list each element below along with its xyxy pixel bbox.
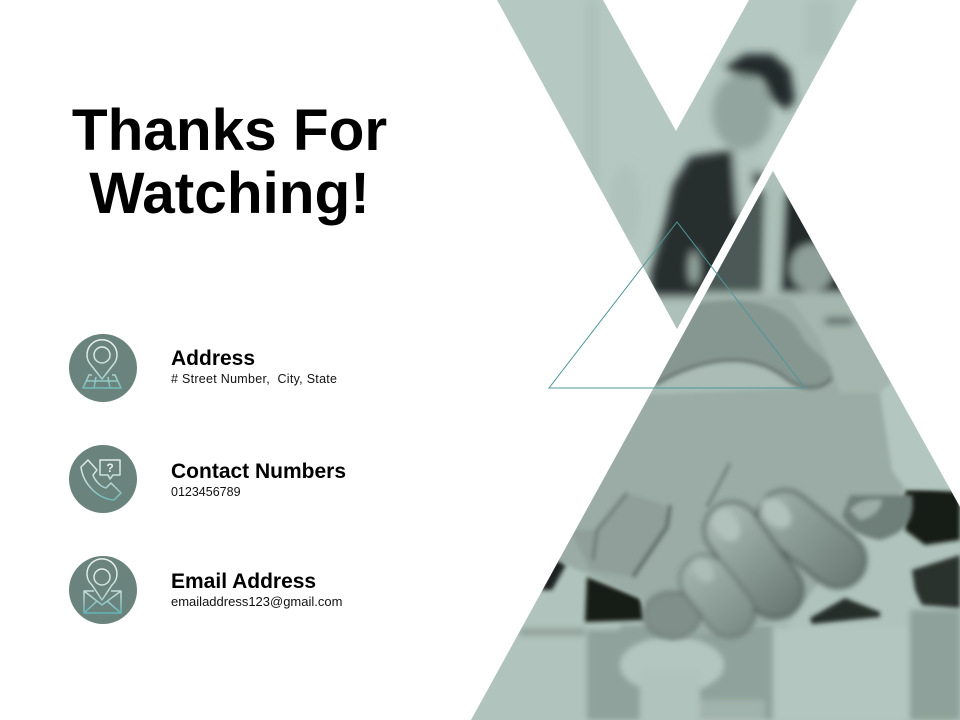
title: Thanks For <box>72 98 387 163</box>
icon: pin over envelope <box>69 556 137 624</box>
address item <box>69 334 337 402</box>
fingers <box>644 492 838 638</box>
outline triangle <box>549 222 805 388</box>
dark background pockets <box>540 488 960 624</box>
man's torso, tie and right hand <box>662 171 900 399</box>
address text: # Street Number, City, State <box>171 372 337 386</box>
icon: phone and question bubble: ? <box>106 461 114 475</box>
handshake <box>540 298 960 640</box>
contact number: 0123456789 <box>171 485 241 499</box>
email heading: Email Address <box>171 570 316 593</box>
email item <box>69 556 342 624</box>
contact item <box>69 445 346 513</box>
address heading: Address <box>171 347 255 370</box>
icon: map pin on map <box>69 334 137 402</box>
email text: emailaddress123@gmail.com <box>171 594 342 609</box>
photo panel: businessman in V shape <box>490 0 865 337</box>
icon: phone and question bubble <box>69 445 137 513</box>
photo panel: handshake in triangle <box>465 165 960 720</box>
background reflections <box>520 610 960 720</box>
title: Watching! <box>89 161 370 226</box>
contact heading: Contact Numbers <box>171 460 346 483</box>
